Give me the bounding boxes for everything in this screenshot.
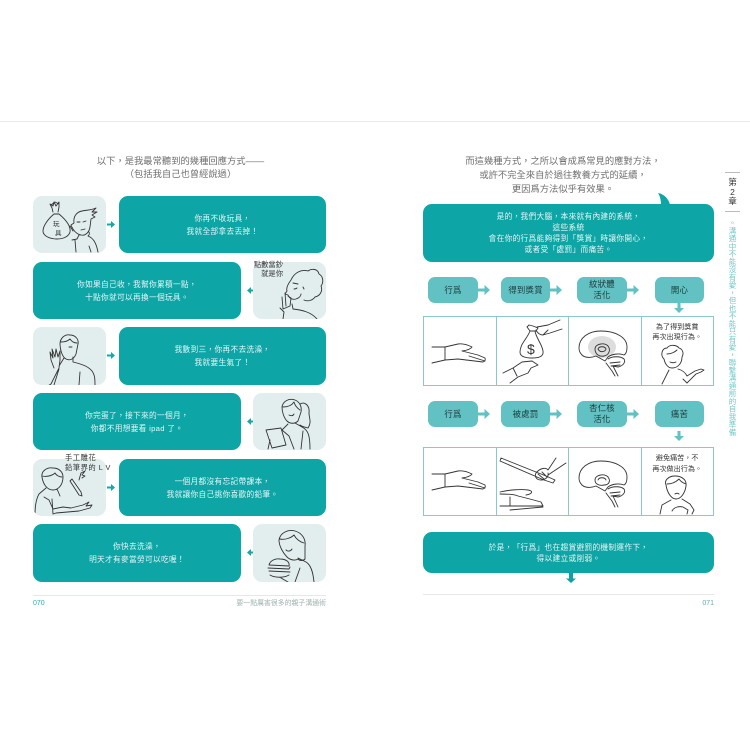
callout: pencil label: 手工雕花 [65, 452, 96, 462]
step: pain: 痛苦 [671, 408, 688, 418]
step: happy: 開心 [671, 284, 688, 294]
cell: brain with amygdala [569, 448, 642, 515]
teal message box: 我數到三，你再不去洗澡， [175, 345, 270, 354]
bubble body: 或者受「處罰」而痛苦。 [525, 245, 612, 254]
cell: hand [424, 448, 496, 515]
caption: 再次做出行為。 [652, 464, 702, 472]
vertical chapter title: 。溝通中不能沒有愛，但也不能只有愛，聯繫溝通前的自我準備 [728, 219, 737, 436]
right heading: 更因爲方法似乎有效果。 [512, 184, 614, 194]
step: striatum: 紋狀體 [589, 279, 615, 289]
teal message box: 你再不收玩具， [195, 214, 250, 222]
cell: boy and caption [652, 323, 704, 384]
conclusion box: 得以建立或削弱。 [537, 554, 600, 562]
caption: 再次出現行為。 [652, 332, 702, 340]
cell: money bag [496, 317, 569, 385]
step: behaviour: 行爲 [444, 408, 462, 418]
callout: speech label [254, 260, 283, 278]
panel: row 4 [33, 393, 326, 450]
arrow [550, 409, 562, 419]
step: striatum [577, 277, 627, 303]
caption: 為了得到獎賞 [656, 323, 698, 331]
callout: pencil label: 鉛筆界的 L V [65, 463, 111, 472]
arrow [247, 418, 253, 425]
bubble body: 是的，我們大腦，本來就有內建的系統， [497, 212, 640, 221]
icon: woman with hamburger [253, 524, 326, 582]
sidebar: chapter tab [725, 172, 740, 436]
step: amygdala [577, 401, 627, 427]
right heading: 或許不完全來自於過往教養方式的延續， [479, 170, 647, 180]
panel: row 6 [33, 524, 326, 582]
arrow [107, 484, 115, 491]
step: behaviour [428, 401, 478, 427]
cell: brain with striatum [569, 317, 642, 385]
arrow [247, 549, 253, 556]
panel: row 3 [33, 327, 326, 385]
conclusion box [423, 532, 714, 573]
cell: money bag: $ [526, 341, 534, 357]
arrow [107, 352, 115, 359]
left footer [33, 595, 326, 613]
panel: row 2 [33, 260, 326, 319]
bubble body: 會在你的行爲能夠得到「獎賞」時讓你開心， [489, 234, 648, 243]
right heading: 而這幾種方式，之所以會成爲常見的應對方法， [465, 156, 661, 166]
step: happy [655, 277, 704, 303]
teal message box [119, 327, 326, 385]
step: reward [501, 277, 550, 303]
teal message box: 我就讓你自己挑你喜歡的鉛筆。 [167, 490, 278, 498]
teal message box: 你完蛋了，接下來的一個月， [85, 410, 189, 420]
bubble tail [658, 193, 670, 204]
caption: 避免痛苦，不 [656, 454, 698, 462]
chapter label: 章 [728, 196, 737, 206]
arrow down [674, 431, 684, 441]
comic strip: punishment [423, 447, 714, 516]
speech bubble: brain system [423, 193, 714, 262]
teal message box: 我就要生氣了！ [195, 358, 250, 367]
callout: pencil label [65, 452, 111, 472]
bubble body: 這些系統 [553, 223, 584, 232]
step: pain [655, 401, 704, 427]
cell: stick and hand [496, 448, 569, 515]
step: striatum: 活化 [593, 290, 611, 300]
step: behaviour: 行爲 [444, 284, 462, 294]
teal message box: 你都不用想要看 ipad 了。 [91, 424, 183, 432]
teal message box: 明天才有麥當勞可以吃喔！ [89, 555, 185, 564]
arrow [478, 409, 490, 419]
comic strip: reward [423, 316, 714, 386]
step: reward: 得到獎賞 [508, 284, 543, 294]
icon: man holding toy bag: 玩 [53, 220, 60, 228]
step: behaviour [428, 277, 478, 303]
icon: man presenting pencil [33, 459, 106, 516]
callout: speech label: 點數當鈔 [254, 260, 283, 269]
bubble body [423, 204, 714, 262]
teal message box: 十點你就可以再換一個玩具。 [85, 292, 189, 302]
left heading: （包括我自己也曾經說過） [125, 169, 236, 179]
right footer [423, 594, 714, 612]
step: punished: 被處罰 [513, 408, 538, 418]
teal message box [119, 459, 326, 516]
top page edge line [0, 121, 750, 122]
teal message box [33, 524, 241, 582]
panel: row 1 [33, 196, 326, 253]
icon: man holding toy bag [33, 196, 106, 253]
icon: woman with tablet [253, 393, 326, 450]
arrow down [674, 303, 684, 313]
caption [652, 454, 702, 472]
right heading [465, 156, 661, 194]
book title: 要一點厲害很多的親子溝通術 [236, 600, 326, 607]
page number 071: 071 [702, 600, 714, 607]
teal message box: 你如果自己收，我幫你累積一點， [77, 280, 197, 288]
teal message box: 我就全部拿去丟掉！ [187, 226, 258, 236]
panel: row 5 [33, 452, 326, 516]
step: amygdala: 活化 [593, 414, 611, 424]
left heading: 以下，是我最常聽到的幾種回應方式—— [97, 156, 264, 166]
arrow [550, 285, 562, 295]
icon: man raising hand [33, 327, 106, 385]
step: punished [501, 401, 550, 427]
callout: speech label: 就是你 [261, 269, 283, 278]
left heading [97, 156, 264, 179]
icon: woman pointing finger [253, 262, 326, 319]
chapter label: 2 [730, 186, 735, 196]
arrow [107, 221, 115, 228]
teal message box [33, 262, 241, 319]
page number 070: 070 [33, 600, 45, 607]
icon: man holding toy bag: 具 [55, 229, 62, 237]
flow: punishment sequence [428, 401, 704, 441]
arrow [478, 285, 490, 295]
chapter label [725, 172, 740, 212]
caption [652, 323, 702, 340]
teal message box [33, 393, 241, 450]
cell: boy and caption [652, 454, 702, 514]
arrow [627, 285, 639, 295]
conclusion box: 於是，「行爲」也在趨賞避罰的機制運作下， [489, 542, 648, 552]
flow: reward sequence [428, 277, 704, 313]
chapter label: 第 [728, 177, 737, 187]
arrow [247, 287, 253, 294]
step: amygdala: 杏仁核 [589, 403, 615, 413]
teal message box [119, 196, 326, 253]
teal message box: 你快去洗澡， [113, 542, 161, 551]
cell: hand [424, 317, 496, 385]
teal message box: 一個月都沒有忘記帶課本， [175, 476, 270, 486]
arrow [627, 409, 639, 419]
arrow down [566, 573, 576, 583]
